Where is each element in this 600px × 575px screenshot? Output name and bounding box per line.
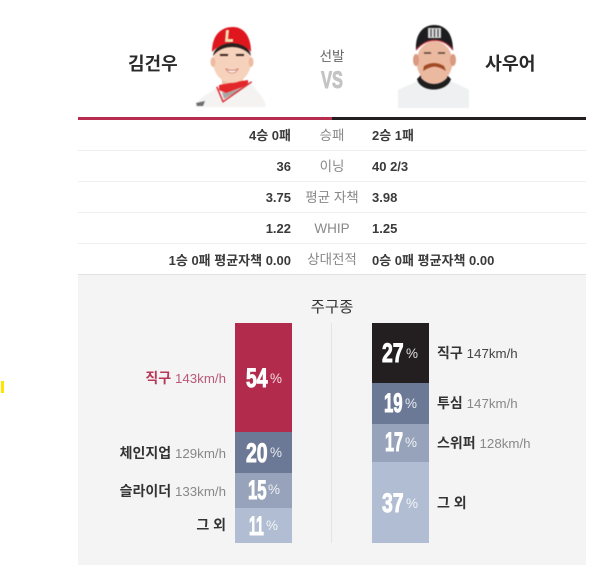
header rule: right team colour bbox=[332, 117, 586, 120]
stat row: ERA: 3.75 bbox=[266, 190, 291, 205]
right label: fastball: 직구 147km/h bbox=[437, 345, 518, 361]
stat row: head to head: 0승 0패 평균자책 0.00 bbox=[372, 253, 494, 268]
stat row: ERA: 3.98 bbox=[372, 190, 397, 205]
segment: other 37% bbox=[372, 462, 429, 543]
segment: other 37%: 37 bbox=[382, 488, 404, 518]
stat row: ERA: 평균 자책 bbox=[305, 190, 359, 205]
segment: slider 15% bbox=[235, 473, 292, 508]
stat row: head to head bbox=[169, 252, 494, 268]
segment: changeup 20%: 20 bbox=[246, 438, 268, 468]
segment: other 11% bbox=[235, 508, 292, 543]
starter label: 선발 bbox=[320, 49, 344, 64]
stat row: innings bbox=[276, 159, 408, 174]
segment: sweeper 17%: 17 bbox=[385, 427, 403, 457]
segment: fastball 27% bbox=[372, 323, 429, 383]
left label: slider: 슬라이더 133km/h bbox=[120, 483, 226, 499]
VS mark: VS bbox=[321, 67, 343, 94]
segment: other 11%: 11 bbox=[249, 511, 264, 541]
left pitcher photo bbox=[196, 26, 266, 107]
centre divider bbox=[331, 323, 332, 543]
stat row: WHIP: WHIP bbox=[314, 221, 350, 236]
segment: other 37%: % bbox=[406, 496, 418, 511]
segment: two-seam 19%: 19 bbox=[384, 388, 403, 418]
segment: fastball 54%: % bbox=[270, 371, 282, 386]
right stacked bar bbox=[372, 323, 429, 543]
left stacked bar bbox=[235, 323, 292, 543]
stat row: WHIP: 1.25 bbox=[372, 221, 397, 236]
panel: main pitches bbox=[78, 274, 586, 565]
stat row: innings: 40 2/3 bbox=[372, 159, 408, 174]
segment: fastball 27%: % bbox=[406, 346, 418, 361]
segment: changeup 20%: % bbox=[270, 445, 282, 460]
segment: two-seam 19% bbox=[372, 383, 429, 424]
stat row: head to head: 상대전적 bbox=[307, 252, 357, 267]
left label: fastball: 직구 143km/h bbox=[145, 370, 226, 386]
stat row: WHIP bbox=[266, 221, 397, 236]
segment: fastball 54%: 54 bbox=[246, 363, 268, 393]
stat row: head to head: 1승 0패 평균자책 0.00 bbox=[169, 253, 291, 268]
stat row: record: 승패 bbox=[320, 128, 344, 143]
stat row: record bbox=[249, 128, 414, 143]
left label: other: 그 외 bbox=[196, 517, 226, 533]
panel heading: 주구종 bbox=[311, 299, 353, 316]
left label: changeup: 체인지업 129km/h bbox=[120, 445, 226, 461]
right label: two-seam: 투심 147km/h bbox=[437, 395, 518, 411]
segment: slider 15%: 15 bbox=[248, 475, 267, 505]
stat row: record: 2승 1패 bbox=[372, 128, 414, 143]
segment: sweeper 17% bbox=[372, 424, 429, 462]
stat row: ERA bbox=[266, 190, 397, 205]
segment: changeup 20% bbox=[235, 432, 292, 473]
stat row: record: 4승 0패 bbox=[249, 128, 291, 143]
right label: sweeper: 스위퍼 128km/h bbox=[437, 435, 531, 451]
segment: fastball 54% bbox=[235, 323, 292, 432]
header rule: left team colour bbox=[78, 117, 332, 120]
stat row: innings: 이닝 bbox=[320, 159, 344, 174]
right label: other: 그 외 bbox=[437, 495, 467, 511]
right pitcher photo bbox=[398, 24, 469, 108]
yellow edge mark bbox=[1, 381, 4, 393]
left pitcher name: 김건우 bbox=[128, 54, 178, 74]
segment: two-seam 19%: % bbox=[405, 396, 417, 411]
segment: sweeper 17%: % bbox=[405, 435, 417, 450]
right pitcher name: 사우어 bbox=[485, 53, 535, 74]
stat row: innings: 36 bbox=[277, 159, 291, 174]
stat row: WHIP: 1.22 bbox=[266, 221, 291, 236]
segment: other 11%: % bbox=[266, 518, 278, 533]
segment: slider 15%: % bbox=[268, 482, 280, 497]
segment: fastball 27%: 27 bbox=[382, 338, 404, 368]
